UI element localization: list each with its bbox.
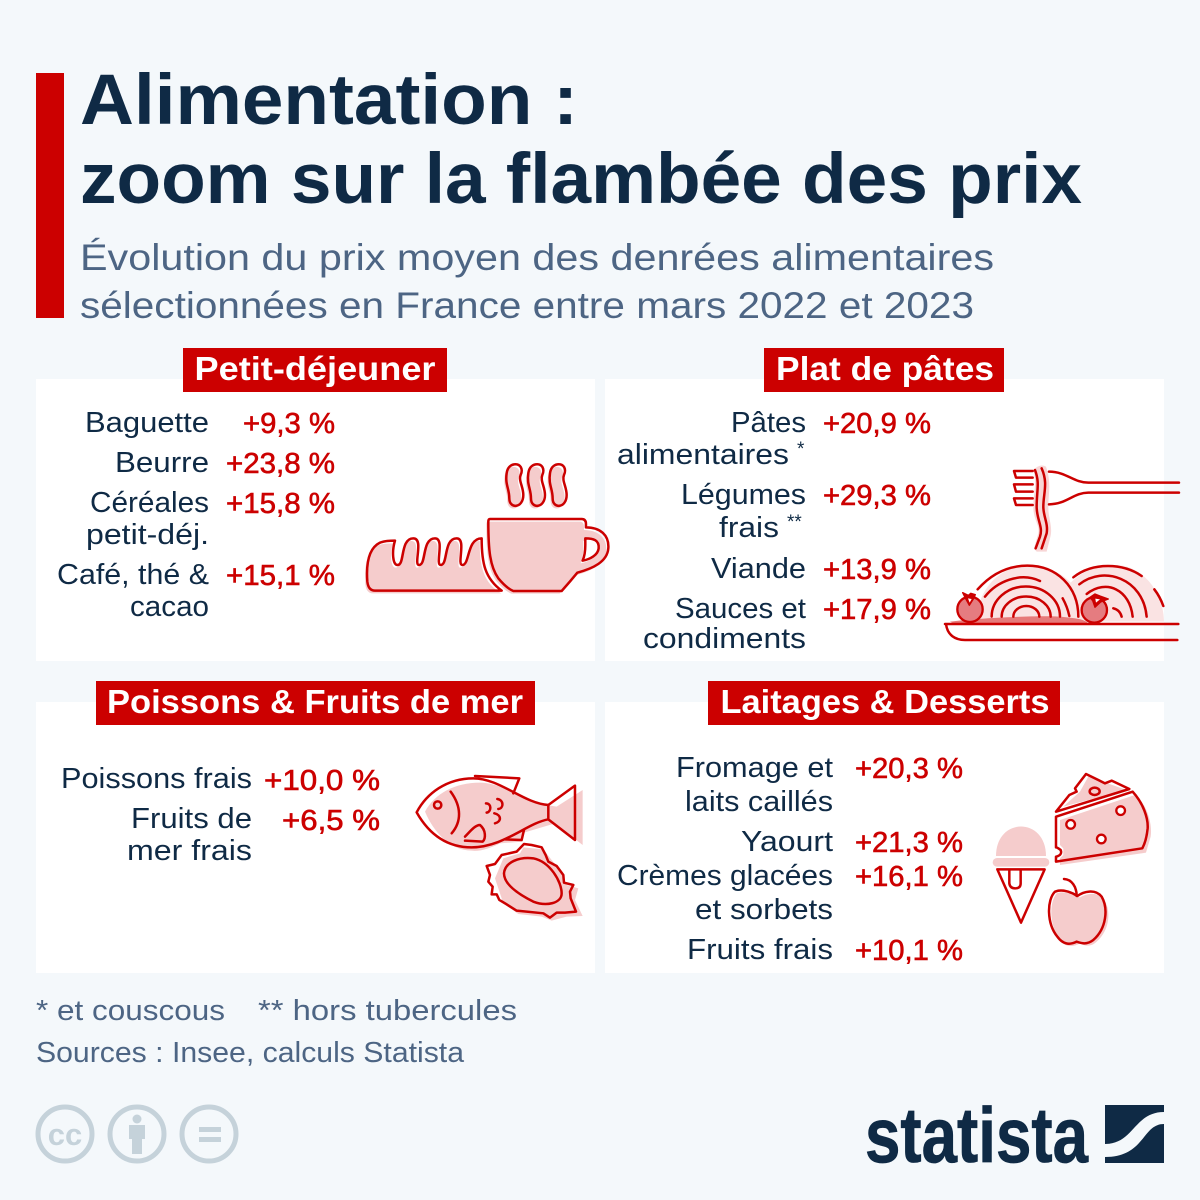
data rows: Laitages & Desserts: Crèmes glacées — [617, 860, 833, 892]
data rows: Plat de pâtes: Sauces et — [675, 593, 806, 625]
title: Alimentation : — [80, 61, 578, 140]
data rows: Plat de pâtes: +29,3 % — [823, 480, 931, 512]
data rows: Plat de pâtes: condiments — [643, 623, 806, 655]
data rows: Plat de pâtes: alimentaires — [617, 439, 789, 471]
data rows: Petit-déjeuner: Céréales — [90, 487, 209, 519]
data rows: Poissons & Fruits de mer: +10,0 % — [264, 765, 380, 797]
data rows: Laitages & Desserts: +20,3 % — [855, 753, 963, 785]
data rows: Petit-déjeuner: petit-déj. — [86, 519, 209, 551]
data rows: Laitages & Desserts: +21,3 % — [855, 827, 963, 859]
data rows: Laitages & Desserts: Yaourt — [741, 826, 833, 858]
footnotes — [36, 995, 517, 1027]
data rows: Petit-déjeuner: +15,1 % — [226, 560, 335, 592]
panel: Laitages & Desserts — [605, 681, 1164, 973]
icon: cheese, ice cream and apple — [993, 774, 1151, 946]
data rows: Plat de pâtes — [617, 407, 931, 655]
data rows: Poissons & Fruits de mer: +6,5 % — [282, 805, 380, 837]
data rows: Plat de pâtes: Viande — [711, 553, 806, 585]
title: zoom sur la flambée des prix — [80, 140, 1082, 219]
icon: Creative Commons licence — [38, 1107, 236, 1161]
subtitle: sélectionnées en France entre mars 2022 et 2023 — [80, 285, 974, 326]
title — [80, 61, 1082, 219]
data rows: Poissons & Fruits de mer — [61, 763, 380, 867]
data rows: Poissons & Fruits de mer: Poissons frais — [61, 763, 252, 795]
logo: Statista: statista — [865, 1091, 1088, 1179]
data rows: Plat de pâtes: ** — [787, 512, 802, 533]
icon: Creative Commons licence: cc — [48, 1117, 82, 1152]
data rows: Petit-déjeuner: Beurre — [115, 447, 209, 479]
data rows: Laitages & Desserts: Fruits frais — [687, 934, 833, 966]
panel: Plat de pâtes — [605, 348, 1179, 661]
data rows: Laitages & Desserts — [617, 752, 963, 967]
data rows: Laitages & Desserts: laits caillés — [685, 786, 833, 818]
panel: Petit-déjeuner — [36, 348, 608, 661]
data rows: Laitages & Desserts: +10,1 % — [855, 935, 963, 967]
data rows: Petit-déjeuner: Baguette — [85, 407, 209, 439]
subtitle — [80, 237, 994, 326]
heading: Plat de pâtes: Plat de pâtes — [776, 350, 994, 387]
data rows: Plat de pâtes: Légumes — [681, 479, 806, 511]
data rows: Plat de pâtes: frais — [719, 512, 779, 544]
icon: fish and oyster — [417, 776, 583, 921]
data rows: Petit-déjeuner: +23,8 % — [226, 448, 335, 480]
data rows: Plat de pâtes: +20,9 % — [823, 408, 931, 440]
data rows: Petit-déjeuner: +9,3 % — [243, 408, 335, 440]
panel: Poissons & Fruits de mer — [36, 681, 595, 973]
data rows: Laitages & Desserts: +16,1 % — [855, 861, 963, 893]
heading: Poissons & Fruits de mer: Poissons & Fruits de mer — [107, 683, 523, 720]
heading: Petit-déjeuner: Petit-déjeuner — [194, 350, 436, 387]
accent bar — [36, 73, 64, 318]
data rows: Poissons & Fruits de mer: Fruits de — [131, 803, 252, 835]
footnotes: ** hors tubercules — [258, 995, 517, 1027]
data rows: Petit-déjeuner: Café, thé & — [57, 559, 209, 591]
heading: Laitages & Desserts: Laitages & Desserts — [720, 683, 1050, 720]
subtitle: Évolution du prix moyen des denrées alimentaires — [80, 237, 994, 278]
data rows: Plat de pâtes: +13,9 % — [823, 554, 931, 586]
data rows: Plat de pâtes: Pâtes — [731, 407, 806, 439]
data rows: Petit-déjeuner — [57, 407, 335, 623]
data rows: Poissons & Fruits de mer: mer frais — [127, 835, 252, 867]
data rows: Petit-déjeuner: cacao — [130, 591, 209, 623]
data rows: Petit-déjeuner: +15,8 % — [226, 488, 335, 520]
data rows: Laitages & Desserts: Fromage et — [676, 752, 833, 784]
icon: baguette and coffee cup — [365, 464, 608, 594]
data rows: Laitages & Desserts: et sorbets — [695, 894, 833, 926]
data rows: Plat de pâtes: +17,9 % — [823, 594, 931, 626]
icon: fork and plate of pasta — [945, 466, 1179, 640]
data rows: Plat de pâtes: * — [797, 439, 805, 460]
source: Sources : Insee, calculs Statista — [36, 1037, 465, 1069]
footnotes: * et couscous — [36, 995, 225, 1027]
